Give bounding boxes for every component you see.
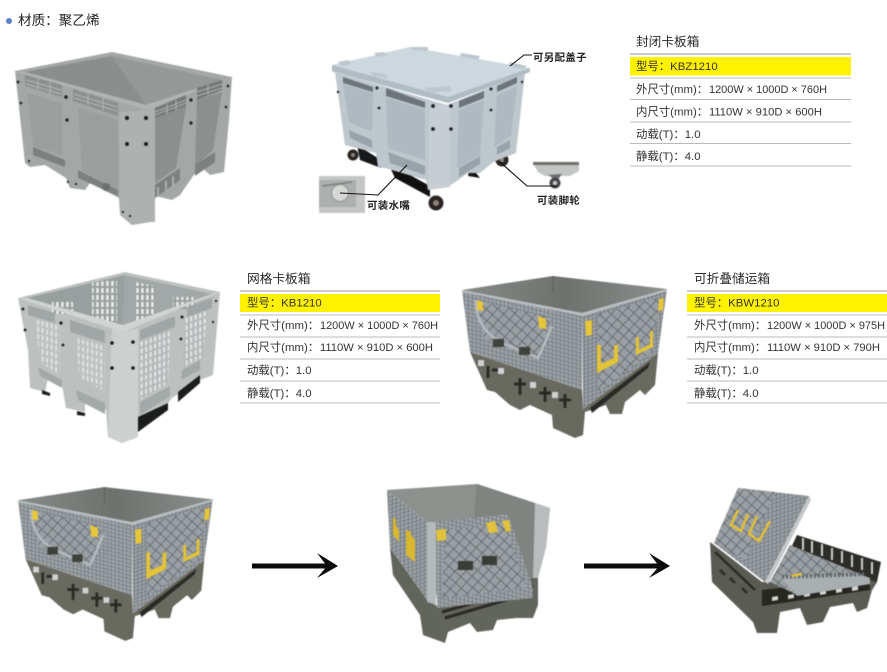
crate photo: collapsible box (462, 276, 667, 438)
model row highlight (630, 57, 851, 76)
arrow: step 1 to step 2 (252, 553, 338, 578)
model row highlight (240, 294, 440, 312)
table heading: 可折叠储运箱 (694, 271, 770, 286)
yellow handles (731, 510, 770, 541)
outer dimensions: 1200W × 1000D × 975H (767, 320, 885, 332)
spec table: collapsible box (687, 271, 887, 403)
table heading: 封闭卡板箱 (636, 34, 700, 49)
outer dimensions: 外尺寸(mm)： (247, 318, 319, 332)
spec table: closed pallet box (630, 34, 851, 166)
label: water nozzle: 可装水嘴 (367, 199, 410, 212)
outer dimensions: 1200W × 1000D × 760H (709, 84, 827, 96)
yellow clips and handles (393, 517, 511, 562)
inner dimensions: 内尺寸(mm)： (694, 340, 766, 354)
inner dimensions: 1110W × 910D × 600H (709, 106, 822, 118)
model: 型号：KBZ1210 (636, 59, 718, 73)
static load: 静载(T)：4.0 (247, 386, 312, 400)
material text: 材质：聚乙烯 (18, 13, 100, 28)
label: casters: 可装脚轮 (537, 194, 580, 207)
arrow: step 2 to step 3 (584, 553, 670, 578)
folding step 2: front wall lowered (387, 484, 550, 643)
inner dimensions: 内尺寸(mm)： (636, 104, 708, 118)
dynamic load: 动载(T)：1.0 (247, 364, 312, 377)
model: 型号：KB1210 (247, 296, 322, 310)
model row highlight (687, 294, 887, 312)
crate photo: lidded box with casters (319, 47, 587, 213)
inner dimensions: 1110W × 910D × 600H (320, 342, 433, 354)
dynamic load: 动载(T)：1.0 (636, 128, 701, 141)
static load: 静载(T)：4.0 (694, 386, 759, 400)
model: 型号：KBW1210 (694, 296, 779, 310)
inset: water nozzle (319, 176, 365, 213)
back wall vent slots (52, 279, 195, 326)
table heading: 网格卡板箱 (247, 271, 311, 286)
bullet (6, 18, 12, 24)
static load: 静载(T)：4.0 (636, 149, 701, 163)
inner dimensions (694, 340, 880, 354)
outer dimensions (636, 82, 827, 96)
outer dimensions (694, 318, 885, 332)
outer dimensions: 外尺寸(mm)： (694, 318, 766, 332)
inner dimensions (636, 104, 822, 118)
inner dimensions: 1110W × 910D × 790H (767, 342, 880, 354)
spec table: mesh pallet box (240, 271, 440, 403)
label: lid: 可另配盖子 (533, 51, 587, 64)
box body (335, 72, 525, 190)
inner dimensions (247, 340, 433, 354)
caster wheels and black pallet (348, 145, 508, 210)
yellow clips and handles (477, 298, 664, 373)
crate photo: mesh pallet box (18, 272, 220, 443)
dynamic load: 动载(T)：1.0 (694, 364, 759, 377)
leader lines (340, 55, 557, 195)
inner dimensions: 内尺寸(mm)： (247, 340, 319, 354)
material heading (6, 13, 100, 28)
crate photo: solid pallet box (15, 52, 232, 225)
outer dimensions (247, 318, 438, 332)
inset: caster (533, 162, 579, 188)
outer dimensions: 1200W × 1000D × 760H (320, 320, 438, 332)
outer dimensions: 外尺寸(mm)： (636, 82, 708, 96)
folding step 1: upright crate (18, 487, 213, 641)
folding step 3: fully collapsed crate (710, 488, 881, 633)
lid (332, 47, 530, 103)
